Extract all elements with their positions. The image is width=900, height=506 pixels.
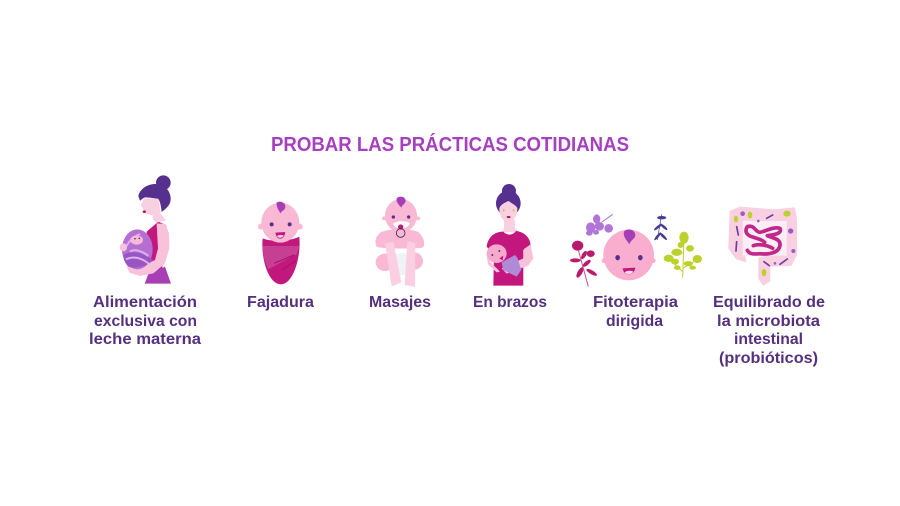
icon: baby massage [375,197,424,287]
icon: baby with medicinal plants [570,214,702,287]
icon: red flower [570,241,598,287]
icon: mother holding baby in arms [487,184,533,286]
label: En brazos: En brazos [473,294,547,311]
label: Alimentación exclusiva con leche materna: Alimentación [93,294,197,311]
icon: purple herb [586,214,613,236]
label: Equilibrado de la microbiota intestinal (probióticos) [713,294,825,367]
icon: intestine with microbiota [729,208,796,284]
label: Masajes: Masajes [369,294,431,311]
label: Equilibrado de la microbiota intestinal (probióticos): (probióticos) [719,350,818,367]
icon: mother breastfeeding baby [120,175,171,284]
label: Equilibrado de la microbiota intestinal (probióticos): Equilibrado de [713,294,825,311]
label: Equilibrado de la microbiota intestinal (probióticos): intestinal [734,331,803,348]
title: PROBAR LAS PRÁCTICAS COTIDIANAS [271,133,629,156]
label: Alimentación exclusiva con leche materna [89,294,201,348]
label: Fajadura: Fajadura [247,294,314,311]
label: Fitoterapia dirigida [593,294,678,330]
label: Fitoterapia dirigida: Fitoterapia [593,294,678,311]
icon: green plant [664,232,702,278]
label: Fitoterapia dirigida: dirigida [606,313,663,330]
label: Alimentación exclusiva con leche materna: leche materna [89,331,201,348]
icon: swaddled baby [258,202,303,284]
label: Equilibrado de la microbiota intestinal (probióticos): la microbiota [717,313,820,330]
icon: dark herb [653,214,668,241]
label: Alimentación exclusiva con leche materna: exclusiva con [94,313,197,330]
